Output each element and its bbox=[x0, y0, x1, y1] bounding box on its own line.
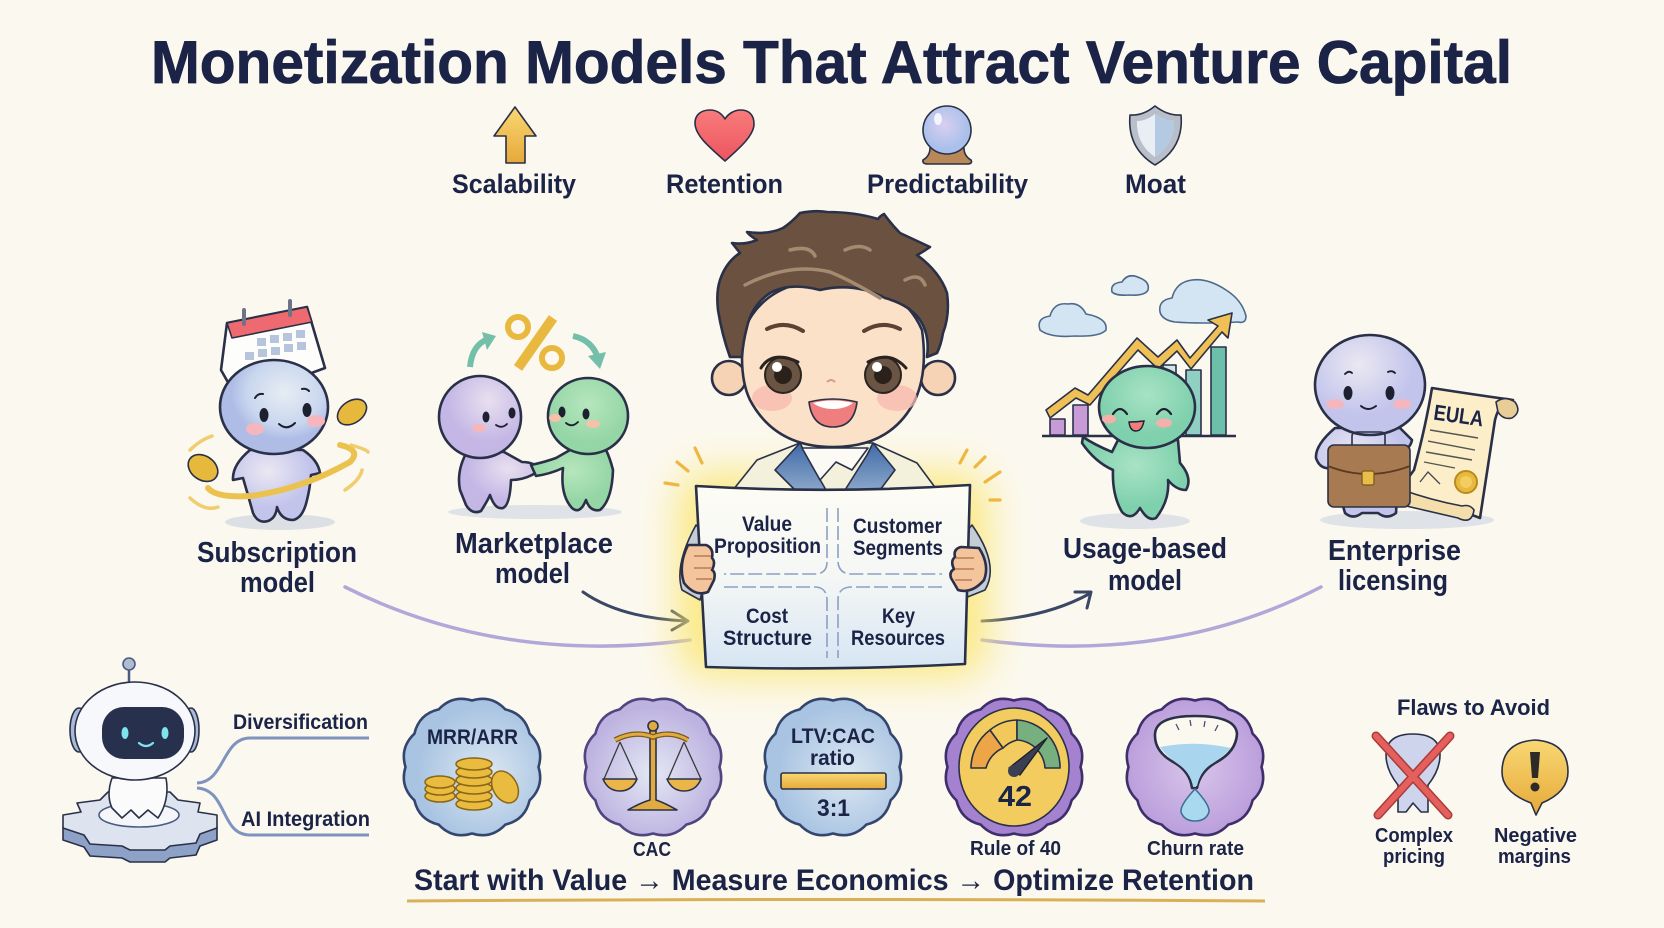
branch: diversification bbox=[197, 711, 369, 783]
gauge bar bbox=[781, 773, 886, 789]
connector: subscription to canvas bbox=[345, 587, 690, 646]
icon: scroll: EULA bbox=[1432, 400, 1485, 431]
canvas: cost structure: Structure bbox=[723, 627, 812, 650]
metric badge: rule of 40 bbox=[946, 699, 1082, 860]
eyes bbox=[765, 357, 801, 393]
icon: leaking funnel bbox=[1155, 716, 1237, 821]
character bbox=[1315, 335, 1425, 516]
pillars row bbox=[452, 106, 1186, 199]
model: usage-based: model bbox=[1108, 565, 1182, 597]
icon: crossed out complex pricing bbox=[1375, 734, 1453, 868]
hair bbox=[717, 211, 948, 357]
canvas: key resources bbox=[851, 605, 945, 650]
pillar: retention bbox=[666, 110, 783, 199]
flaws to avoid bbox=[1375, 695, 1577, 868]
icon: coin stacks bbox=[425, 758, 524, 810]
sleeves bbox=[680, 525, 990, 600]
canvas: customer segments bbox=[853, 515, 943, 560]
model: subscription: model bbox=[240, 567, 315, 599]
icon: calendar bbox=[221, 301, 325, 400]
canvas: key resources: Resources bbox=[851, 627, 945, 650]
metric badge: CAC bbox=[585, 699, 721, 861]
icon: warning negative margins bbox=[1494, 740, 1577, 868]
icon: crossed out complex pricing: Complex bbox=[1375, 825, 1453, 847]
face bbox=[742, 280, 924, 447]
canvas: customer segments: Customer bbox=[853, 515, 942, 538]
character body bbox=[233, 450, 320, 522]
center character bbox=[665, 211, 1000, 600]
summary line: Start with Value → Measure Economics → Optimize Retention bbox=[414, 864, 1254, 897]
business model canvas bbox=[696, 485, 970, 668]
metric badge: LTV:CAC ratio: ratio bbox=[810, 747, 855, 770]
central glow bbox=[678, 472, 988, 677]
purple character bbox=[439, 376, 540, 512]
metric badge: LTV:CAC ratio: 3:1 bbox=[817, 795, 850, 822]
label: Marketplace bbox=[455, 528, 613, 560]
chart: growth arrow bbox=[1046, 313, 1232, 418]
character body bbox=[1082, 437, 1188, 519]
canvas: value proposition: Proposition bbox=[714, 535, 821, 558]
robot on gear bbox=[63, 658, 370, 862]
metric badge: churn rate: Churn rate bbox=[1147, 838, 1244, 860]
icon: scroll bbox=[1397, 388, 1518, 520]
model: enterprise licensing: licensing bbox=[1338, 565, 1448, 597]
green character bbox=[531, 378, 628, 510]
sparks bbox=[665, 448, 1000, 500]
title: Monetization Models That Attract Venture Capital bbox=[151, 29, 1512, 96]
canvas: key resources: Key bbox=[882, 605, 915, 628]
pillar: predictability: Predictability bbox=[867, 169, 1028, 199]
metric badge: LTV:CAC ratio: LTV:CAC bbox=[791, 725, 875, 748]
left hand bbox=[682, 545, 715, 593]
branch: ai integration bbox=[197, 788, 370, 835]
metric badge: MRR/ARR: MRR/ARR bbox=[427, 726, 518, 749]
canvas: cost structure bbox=[723, 605, 812, 650]
flaws to avoid: Flaws to Avoid bbox=[1397, 695, 1550, 720]
icon: warning negative margins: margins bbox=[1498, 846, 1571, 868]
mouth bbox=[809, 399, 857, 427]
icon: robot bbox=[70, 658, 199, 818]
suit bbox=[733, 443, 937, 490]
ears bbox=[712, 361, 746, 395]
metric badge: CAC: CAC bbox=[633, 839, 671, 861]
metric badge: rule of 40: 42 bbox=[998, 781, 1032, 813]
right hand bbox=[950, 547, 986, 591]
label: Enterprise bbox=[1328, 535, 1461, 567]
model: subscription bbox=[183, 301, 371, 599]
icon: crossed out complex pricing: pricing bbox=[1383, 846, 1445, 868]
model: marketplace bbox=[439, 317, 628, 590]
pillar: predictability bbox=[867, 106, 1028, 199]
metric badge: LTV:CAC ratio bbox=[765, 699, 901, 835]
icon: dial bbox=[971, 720, 1060, 777]
metric badge: churn rate bbox=[1127, 699, 1263, 860]
chart: bars bbox=[1042, 347, 1236, 436]
label: Usage-based bbox=[1063, 533, 1227, 565]
icon: clouds bbox=[1039, 276, 1246, 336]
branch: ai integration: AI Integration bbox=[241, 808, 370, 831]
pillar: scalability bbox=[452, 107, 576, 199]
metric badge: rule of 40: Rule of 40 bbox=[970, 838, 1061, 860]
icon: warning negative margins: Negative bbox=[1494, 825, 1577, 847]
arrow: marketplace to canvas bbox=[583, 592, 688, 630]
label: Subscription bbox=[197, 537, 357, 569]
pillar: scalability: Scalability bbox=[452, 169, 576, 199]
pillar: moat bbox=[1125, 106, 1186, 199]
metric badge: MRR/ARR bbox=[404, 699, 540, 835]
icon: gear bbox=[63, 792, 217, 862]
branch: diversification: Diversification bbox=[233, 711, 368, 734]
canvas: customer segments: Segments bbox=[853, 537, 943, 560]
canvas: value proposition bbox=[714, 513, 821, 558]
connector: enterprise to canvas bbox=[982, 587, 1321, 646]
icon: balance scale bbox=[603, 721, 701, 810]
pillar: retention: Retention bbox=[666, 169, 783, 199]
arrow: canvas to usage-based bbox=[982, 592, 1091, 621]
model: marketplace: model bbox=[495, 558, 570, 590]
model: usage-based bbox=[1039, 276, 1246, 597]
pillar: moat: Moat bbox=[1125, 169, 1186, 199]
model: enterprise licensing bbox=[1315, 335, 1518, 597]
icon: percent and arrows bbox=[470, 317, 606, 369]
canvas: cost structure: Cost bbox=[746, 605, 788, 628]
icon: briefcase bbox=[1328, 432, 1410, 507]
canvas: value proposition: Value bbox=[742, 513, 792, 536]
icon: money ring bbox=[183, 394, 371, 508]
